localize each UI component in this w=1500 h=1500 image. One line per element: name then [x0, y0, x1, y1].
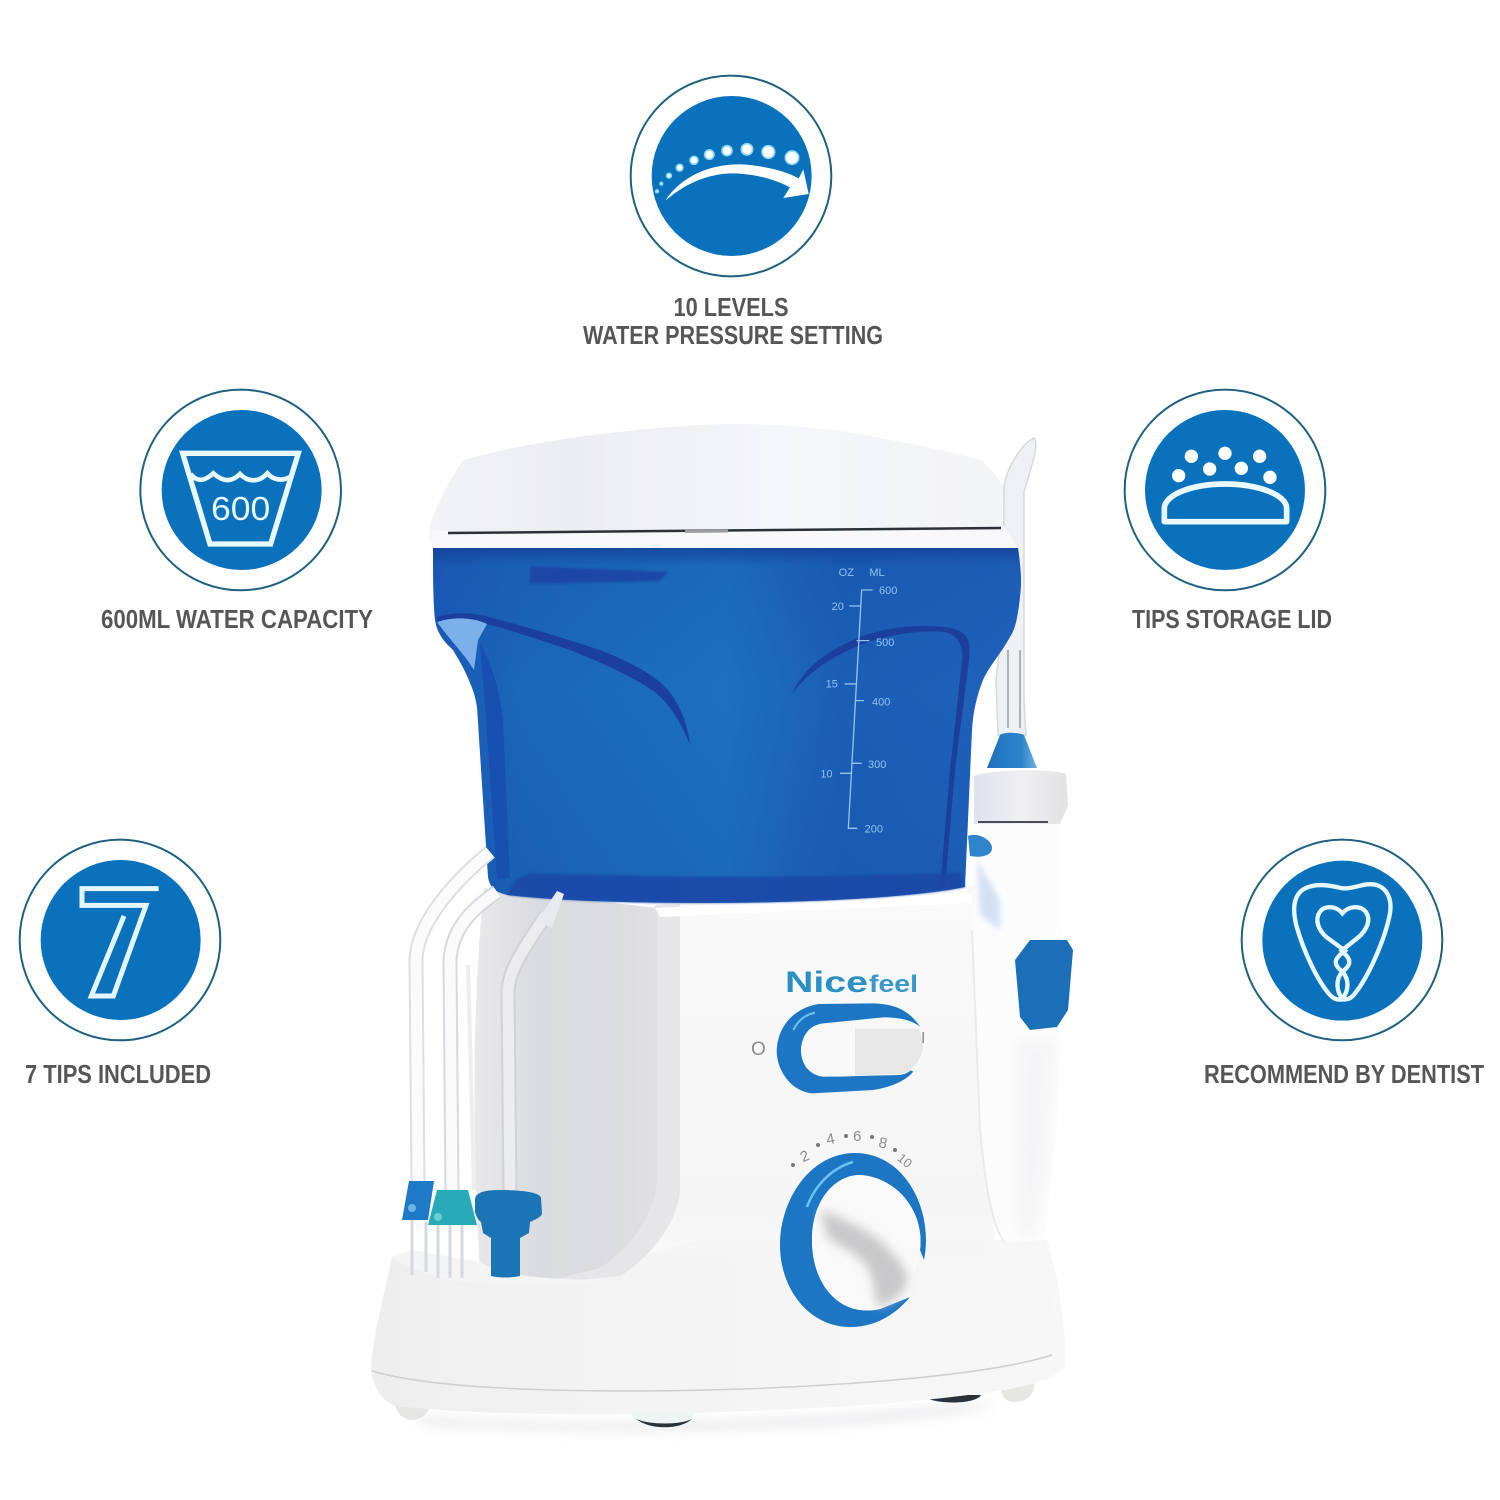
tank left inner band	[480, 643, 510, 880]
lid seam grey break	[685, 530, 728, 533]
lid	[430, 424, 1003, 531]
base seam	[372, 1355, 1052, 1391]
power switch	[777, 1003, 923, 1093]
tank scale	[820, 567, 897, 835]
handle upper shade	[977, 860, 1000, 930]
tank scale: 10	[820, 768, 833, 780]
tank scale: 500	[876, 637, 894, 649]
base platform	[371, 1240, 1065, 1414]
front body	[620, 885, 1055, 1340]
heading: 10 levels water pressure setting: 10 LEVELS	[674, 292, 788, 322]
handle collar	[974, 770, 1068, 824]
tank scale: 600	[879, 585, 897, 597]
label: tips storage lid: TIPS STORAGE LID	[1132, 604, 1332, 634]
switch marks: I	[921, 1030, 925, 1047]
brand: Nicefeel	[785, 966, 918, 999]
tank highlight	[437, 618, 487, 670]
tip nozzle	[537, 891, 564, 928]
collar seam	[978, 821, 1048, 823]
storage tips	[416, 852, 546, 1195]
brand: Nicefeel: Nice	[785, 966, 868, 999]
left arch	[437, 613, 690, 745]
tank scale: 200	[865, 823, 883, 835]
lid seam	[448, 528, 1001, 533]
platform top surface	[392, 1250, 612, 1284]
tank scale: 300	[868, 759, 886, 771]
tank upper band	[530, 566, 668, 584]
icon: number 7	[20, 840, 220, 1040]
side panel	[560, 904, 680, 1282]
feet	[395, 1380, 1035, 1428]
tank scale: 20	[832, 601, 844, 613]
tank scale: OZ	[839, 567, 854, 579]
dial scale numbers: 2	[798, 1147, 812, 1166]
tank shading	[433, 548, 1021, 903]
icon: tips storage lid	[1125, 390, 1325, 590]
handle nozzle tip	[996, 438, 1036, 735]
handle cap	[987, 733, 1037, 768]
heading: 10 levels water pressure setting	[583, 292, 883, 350]
icon: tooth with heart	[1242, 840, 1442, 1040]
handle button	[1015, 940, 1073, 1030]
tank scale: 400	[872, 696, 890, 708]
right arch	[792, 626, 970, 888]
tank lower band	[507, 872, 965, 903]
icon: 600ml cup	[140, 390, 341, 590]
pressure dial	[780, 1153, 926, 1327]
dial scale numbers: 8	[877, 1134, 889, 1153]
handle left edge	[972, 930, 1005, 1243]
dial scale numbers	[791, 1128, 915, 1171]
front panel edge	[655, 893, 972, 917]
heading: 10 levels water pressure setting: WATER PRESSURE SETTING	[583, 320, 883, 350]
product: water flosser device	[371, 424, 1073, 1430]
tips well	[474, 888, 657, 1280]
handle body shade	[1014, 1040, 1056, 1235]
reservoir tank	[433, 548, 1021, 903]
tank scale: 15	[826, 679, 838, 691]
label: 7 tips included: 7 TIPS INCLUDED	[25, 1059, 211, 1089]
brand: Nicefeel: feel	[869, 971, 918, 998]
white ring under lid	[429, 526, 1018, 548]
handle body	[972, 822, 1062, 1243]
icon: 600ml cup: 600	[211, 491, 270, 528]
switch marks	[751, 1030, 925, 1060]
dial scale numbers: 6	[853, 1128, 861, 1145]
switch marks: O	[751, 1039, 766, 1060]
floor shadow	[420, 1404, 1000, 1430]
label: 600ml water capacity: 600ML WATER CAPACITY	[101, 604, 373, 634]
tip collars	[402, 1181, 542, 1278]
handle clip	[968, 835, 992, 857]
icon: water pressure arrow	[631, 76, 831, 276]
dial scale numbers: 4	[825, 1130, 836, 1149]
dial scale numbers: 10	[894, 1150, 915, 1171]
tank scale: ML	[869, 567, 885, 579]
